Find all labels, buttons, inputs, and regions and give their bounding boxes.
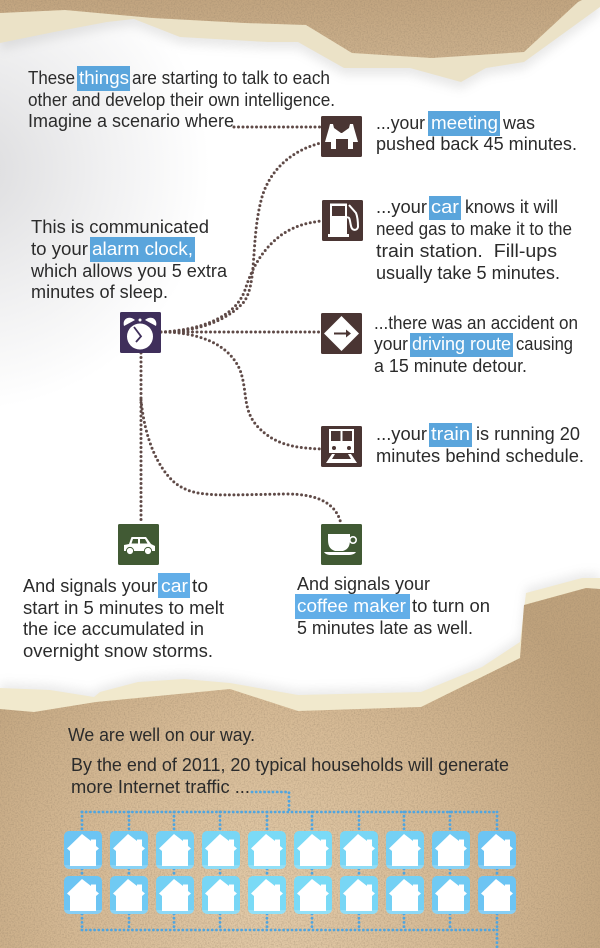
text: coffee maker: And signals your [297,574,430,594]
text: alarm clock: alarm clock, [92,239,193,259]
text: alarm clock: minutes of sleep. [31,282,168,302]
text: coffee maker: 5 minutes late as well. [297,618,473,638]
text: car fuel [376,196,572,283]
text: meeting: ...your [376,113,425,133]
text: coffee maker: to turn on [412,596,490,616]
house row 2 [64,876,516,914]
highlight: coffee maker [295,594,410,619]
text: car start: start in 5 minutes to melt [23,598,224,618]
text: coffee maker: coffee maker [297,596,406,616]
icon: train [321,426,362,467]
text: driving route: a 15 minute detour. [374,356,527,376]
icon: coffee cup [321,524,362,565]
text: car fuel: knows it will [465,197,558,217]
text: internet traffic: more Internet traffic ... [71,777,250,797]
text: meeting: pushed back 45 minutes. [376,134,577,154]
text: driving route: causing [516,334,573,354]
text: car fuel: ...your [376,197,427,217]
highlight: car [158,573,190,598]
intro text: things [79,68,129,88]
text: alarm clock: This is communicated [31,217,209,237]
text: train: ...your [376,424,427,444]
icon: car [118,524,159,565]
highlight: driving route [410,333,513,357]
text: alarm clock: which allows you 5 extra [30,261,228,281]
torn paper: bottom [0,573,600,948]
icon: gas pump [322,200,363,241]
highlight: things [77,66,130,91]
text: car start: to [192,576,208,596]
dotted connectors [141,127,341,524]
text: well on our way: We are well on our way. [68,725,255,745]
house grid [64,831,516,914]
text: train [376,423,584,466]
text: internet traffic: By the end of 2011, 20 typical households will generate [71,755,509,775]
text: coffee maker [295,574,490,638]
intro text: other and develop their own intelligence. [28,90,335,110]
icon: meeting [321,116,362,157]
house row 1 [64,831,516,869]
text: car fuel: need gas to make it to the [376,219,572,239]
text: train: minutes behind schedule. [376,446,584,466]
text: driving route: driving route [412,334,511,354]
icon: alarm clock [120,312,161,353]
intro text: are starting to talk to each [132,68,330,88]
text: driving route: your [374,334,408,354]
intro text: These [28,68,75,88]
icon: detour diamond [321,313,362,354]
text: car start [23,573,224,661]
text: car fuel: train station. Fill-ups [376,241,557,261]
network lines [82,792,497,948]
text: driving route [374,313,578,376]
text: train: train [431,424,470,444]
text: train: is running 20 [476,424,580,444]
text: car fuel: car [431,197,459,217]
torn paper: top [0,0,600,89]
text: car start: overnight snow storms. [23,641,213,661]
text: internet traffic [71,755,509,797]
text: driving route: ...there was an accident on [374,313,578,333]
highlight: car [429,196,461,220]
intro text [28,66,335,131]
text: meeting: was [502,113,535,133]
text: meeting: meeting [431,113,498,133]
intro text: Imagine a scenario where [28,111,234,131]
text: car start: car [161,576,188,596]
text: alarm clock: to your [31,239,88,259]
highlight: meeting [428,111,500,136]
text: meeting [376,111,577,154]
text: car start: the ice accumulated in [23,619,204,639]
highlight: alarm clock [90,237,195,262]
text: car start: And signals your [23,576,157,596]
text: car fuel: usually take 5 minutes. [376,263,560,283]
highlight: train [429,423,472,447]
text: alarm clock [30,217,228,302]
